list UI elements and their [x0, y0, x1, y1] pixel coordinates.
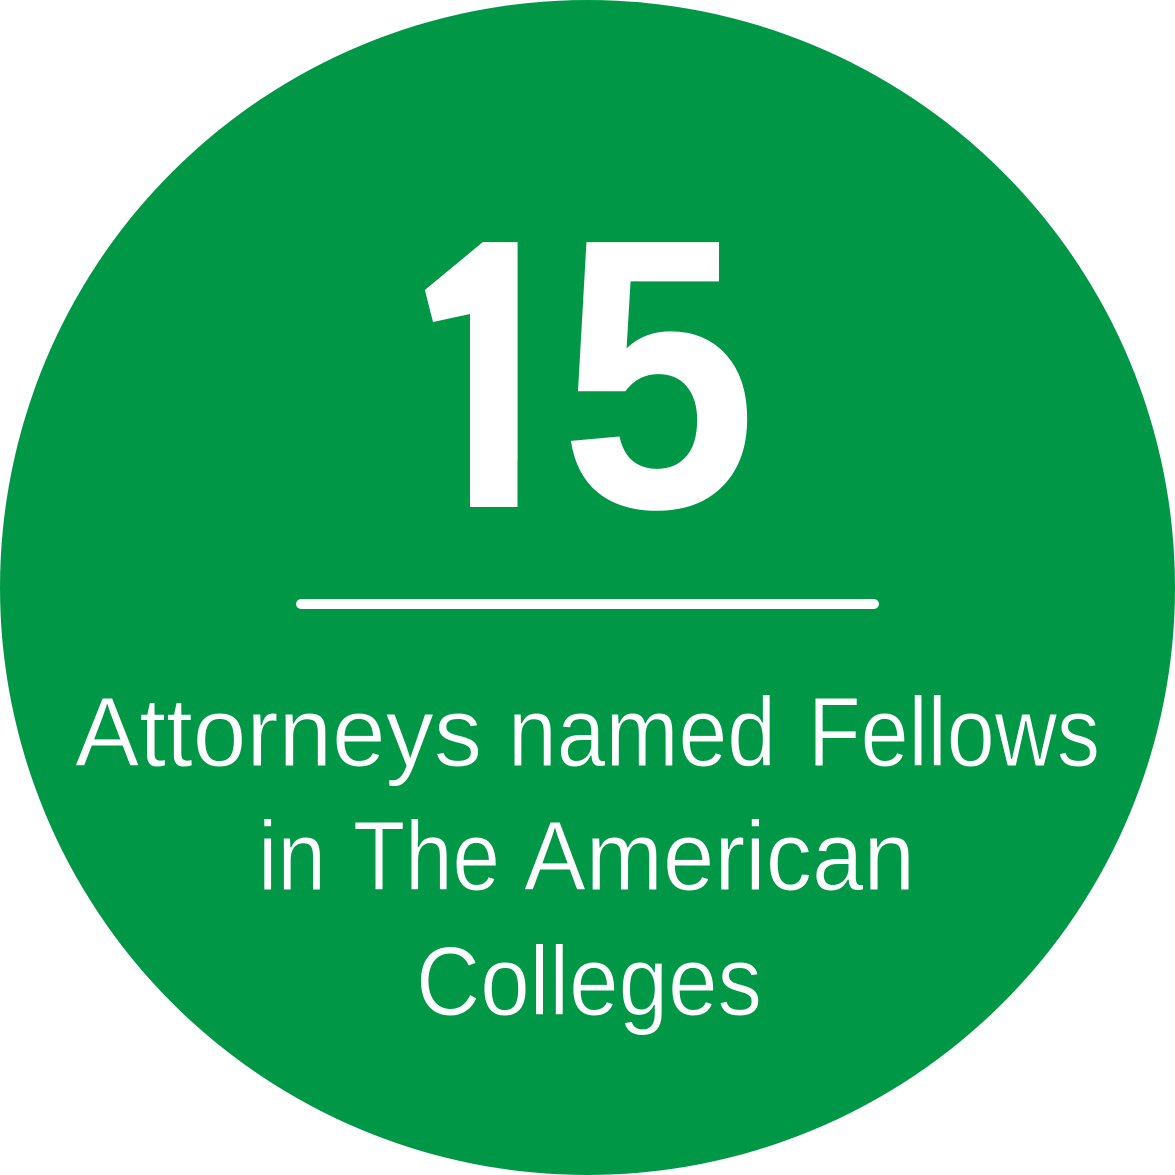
caption text: Attorneys	[75, 677, 482, 787]
caption text: named	[508, 677, 776, 787]
caption text: in	[258, 801, 326, 911]
caption text: The	[353, 801, 500, 911]
caption text: Fellows	[808, 677, 1100, 787]
big number: 15: 1	[389, 158, 582, 589]
caption text: Colleges	[416, 926, 762, 1036]
caption text	[75, 677, 1100, 1036]
big number: 15: 5	[560, 158, 757, 589]
divider line	[296, 599, 879, 609]
big number: 15	[380, 158, 757, 589]
caption text: American	[524, 801, 915, 911]
